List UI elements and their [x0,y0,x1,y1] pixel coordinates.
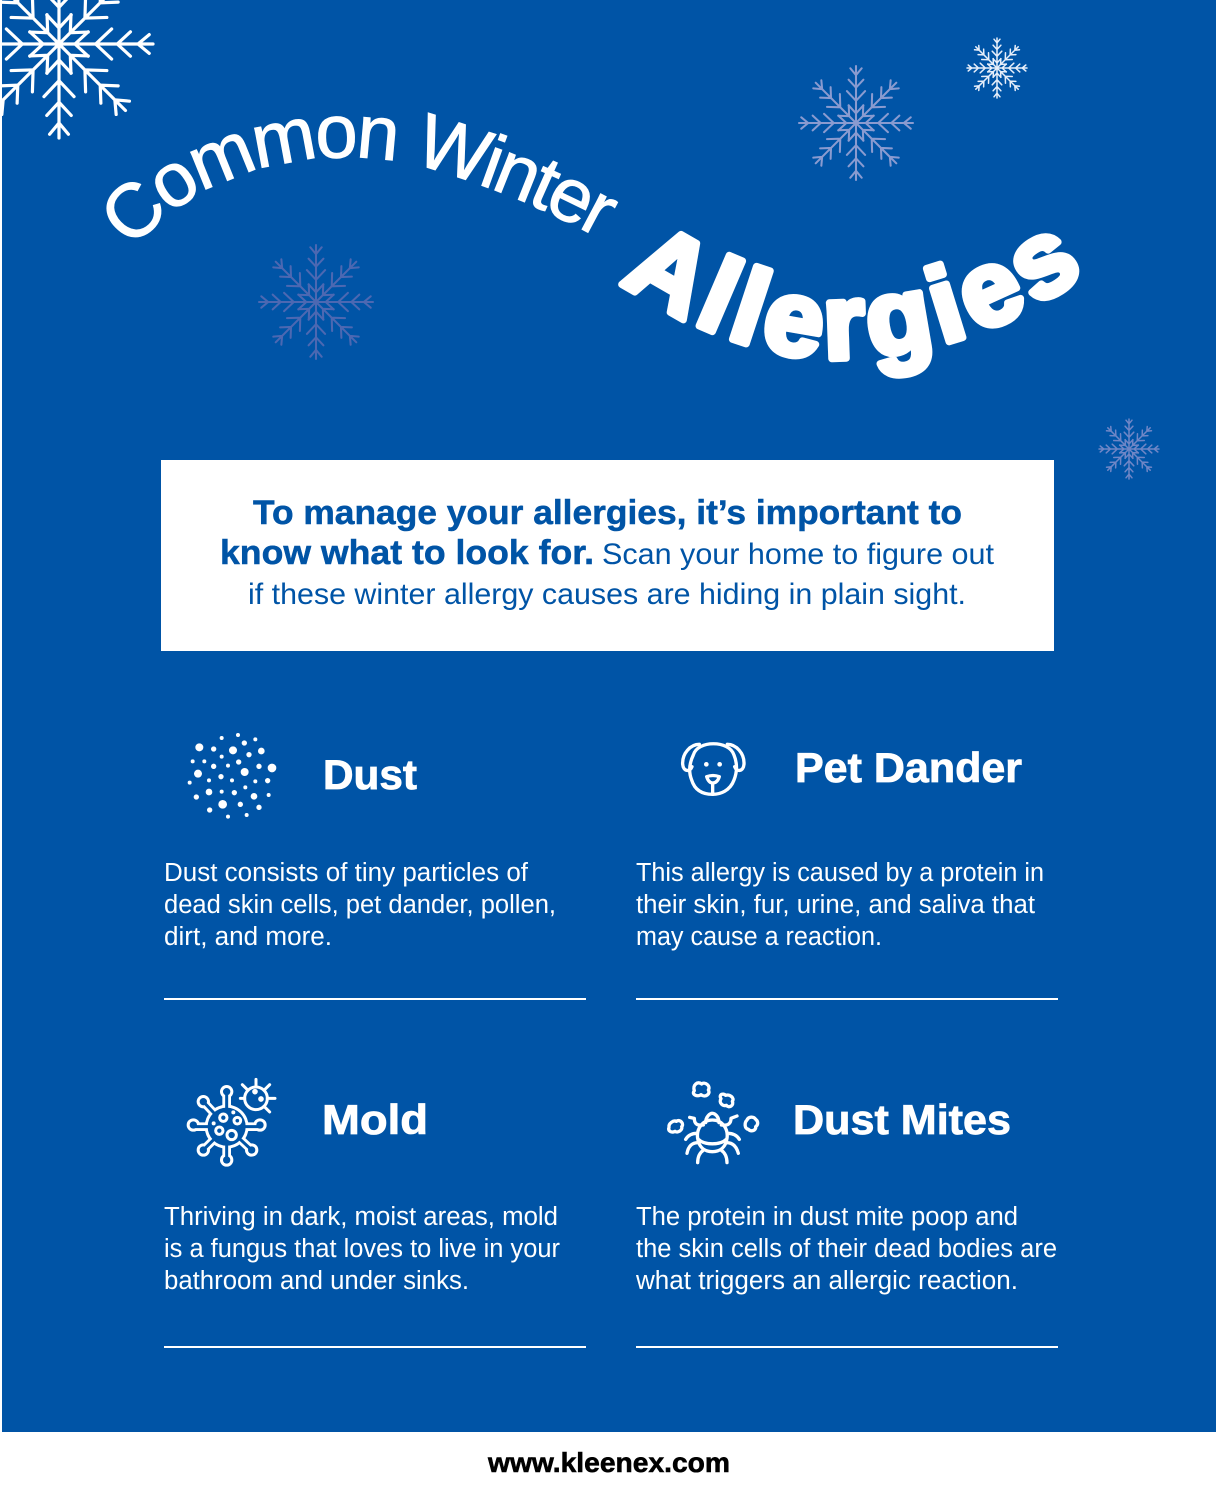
panel: intro callout: if these winter allergy causes are hiding in plain sight. [248,578,966,611]
text: dust mites description: the skin cells of their dead bodies are [636,1235,1057,1263]
text: mold description: Thriving in dark, moist areas, mold [164,1203,558,1231]
text: dust description: dirt, and more. [164,923,332,951]
icon: dust mite [669,1083,758,1163]
icon: dust particles [188,733,276,818]
heading: mold: Mold [322,1096,428,1143]
icon: lavender snowflake [799,66,913,180]
text: mold description [164,1203,560,1295]
text: pet dander description: may cause a reaction. [636,923,882,951]
text: pet dander description: their skin, fur, urine, and saliva that [636,891,1035,919]
text: dust description: Dust consists of tiny particles of [164,859,529,887]
text: dust mites description: The protein in dust mite poop and [636,1203,1018,1231]
icon: large white snowflake [0,0,153,138]
panel: intro callout: know what to look for. [220,534,594,572]
panel: dust mites [635,1083,1058,1348]
icon: mold spores [187,1079,275,1167]
icon: small white snowflake [967,38,1027,98]
panel: intro callout [161,460,1054,651]
title: Allergies: Allergies [618,230,1080,379]
heading: pet dander: Pet Dander [795,744,1022,791]
heading: dust: Dust [323,751,417,798]
icon: faint snowflake [259,245,373,359]
icon: dog face [683,744,744,794]
title: Common Winter: Common Winter [106,112,618,238]
heading: dust mites: Dust Mites [793,1096,1011,1143]
text: mold description: is a fungus that loves to live in your [164,1235,560,1263]
panel: intro callout: To manage your allergies, it’s important to [253,494,962,532]
footer url: www.kleenex.com [487,1447,730,1478]
text: mold description: bathroom and under sinks. [164,1267,469,1295]
icon: small faint snowflake [1099,419,1159,479]
text: pet dander description: This allergy is caused by a protein in [636,859,1044,887]
text: dust description [164,859,556,951]
panel: mold [164,1079,586,1348]
text: dust description: dead skin cells, pet dander, pollen, [164,891,556,919]
text: pet dander description [636,859,1044,951]
panel: dust [164,733,586,1000]
panel: intro callout: Scan your home to figure out [602,538,995,571]
text: dust mites description [635,1203,1057,1295]
panel: pet dander [636,744,1058,1000]
text: dust mites description: what triggers an allergic reaction. [635,1267,1018,1295]
